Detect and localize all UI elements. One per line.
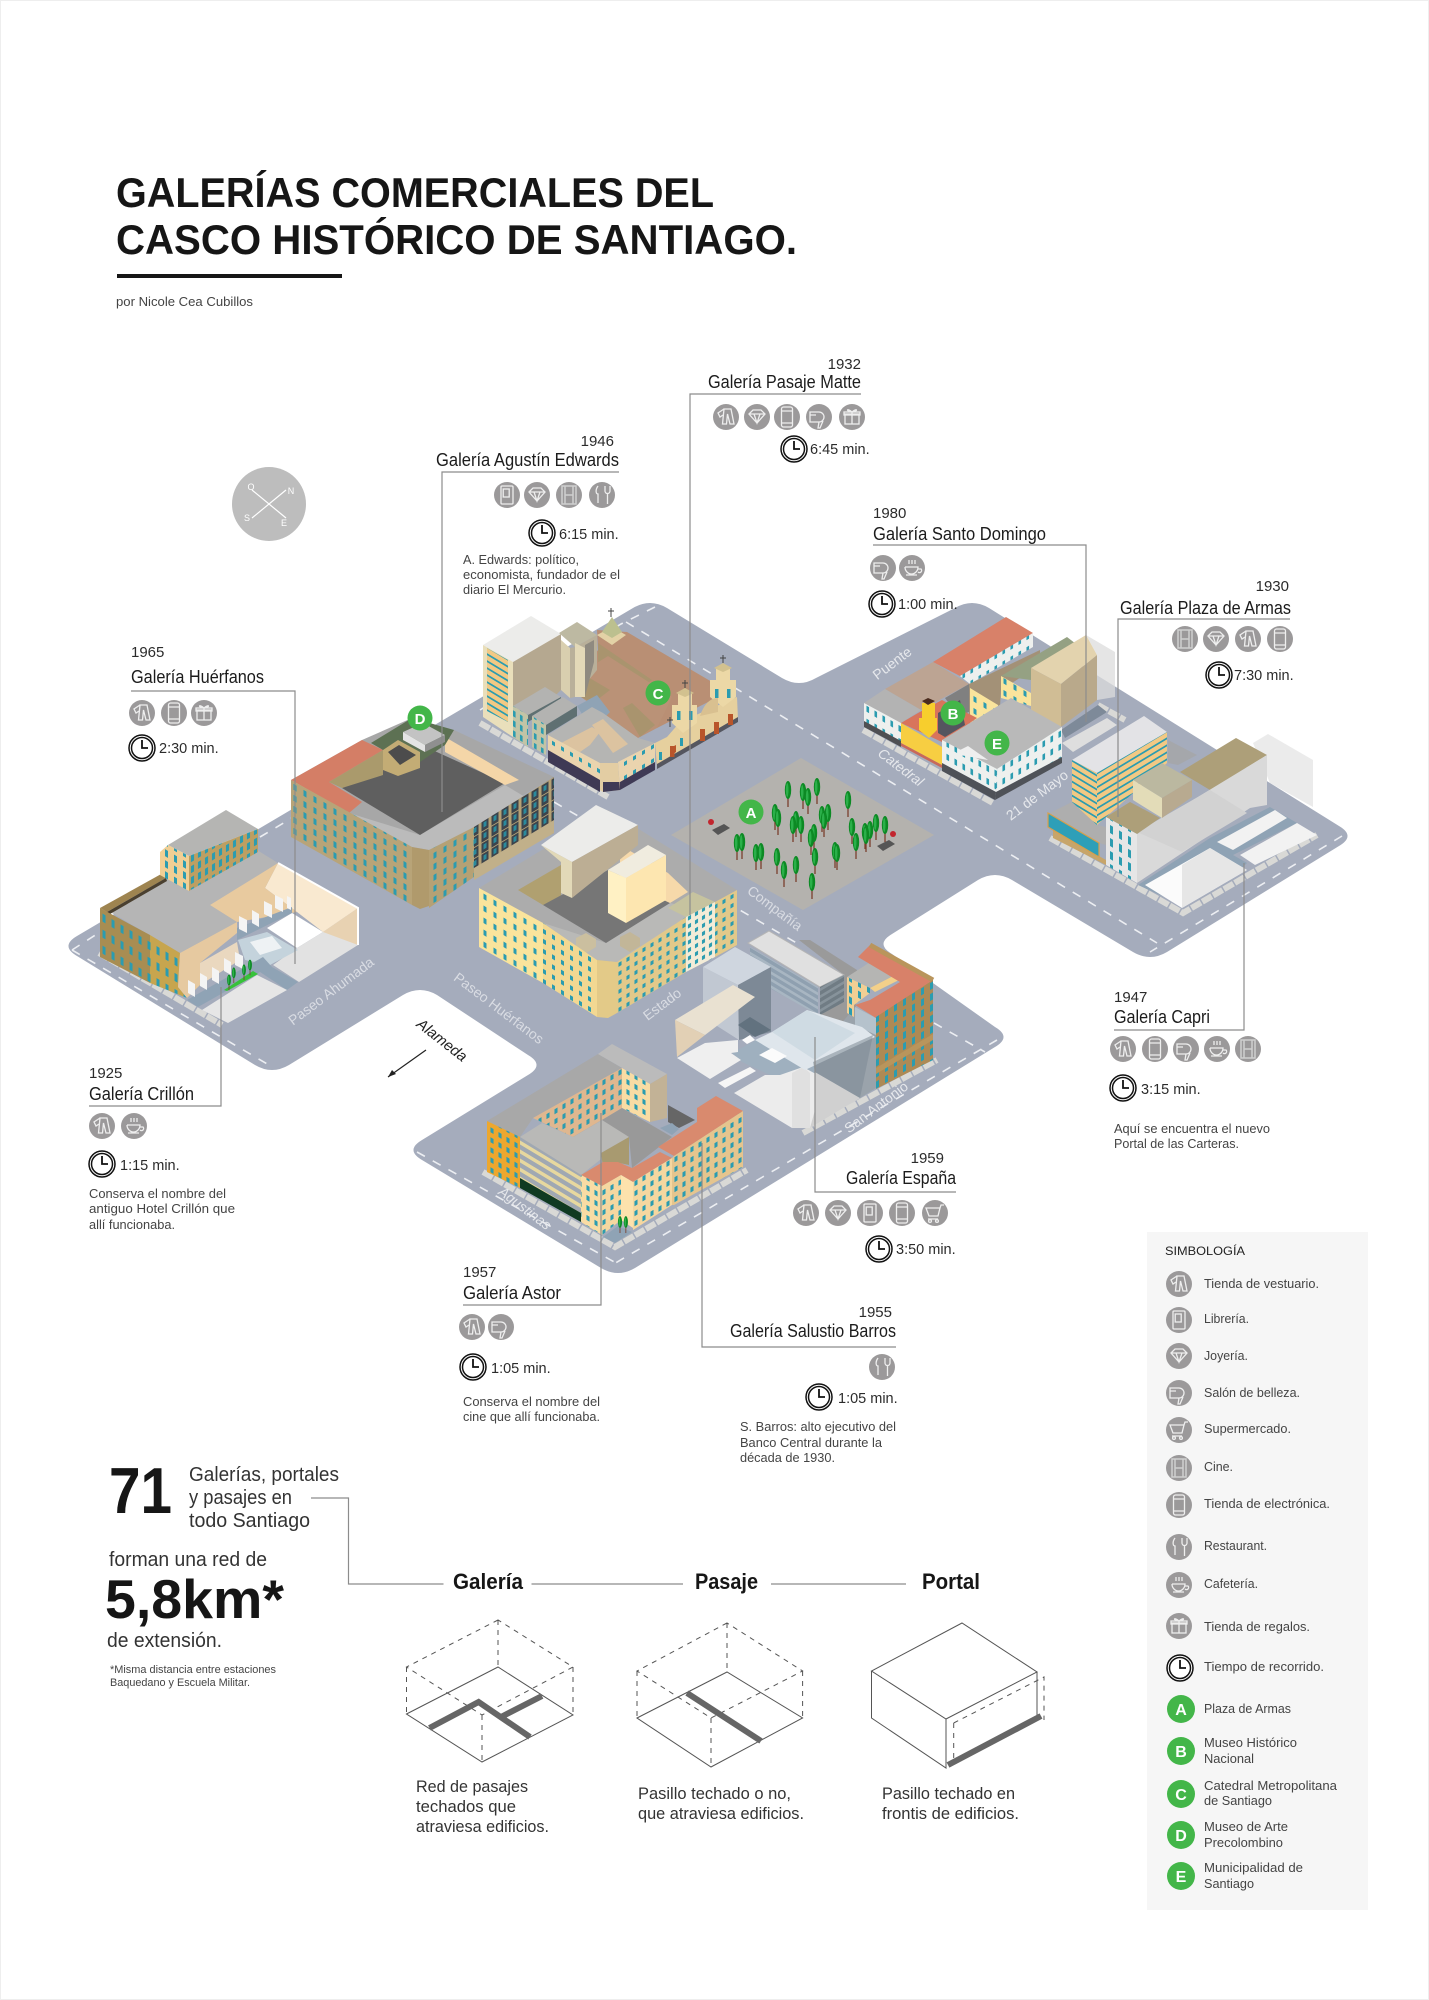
Alameda arrow — [388, 1015, 470, 1077]
callout: Galería Crillón — [89, 987, 235, 1232]
callout: Galería Agustín Edwards: diario El Mercurio. — [463, 582, 566, 597]
ghost box — [1253, 734, 1313, 807]
legend labels: Restaurant. — [1204, 1539, 1267, 1553]
callout: Galería Capri: Aquí se encuentra el nuevo — [1114, 1121, 1270, 1136]
caption: Pasaje — [638, 1784, 804, 1823]
red-roof wing — [933, 617, 1033, 676]
translucent volumes — [703, 947, 771, 985]
legend labels: Plaza de Armas — [1204, 1702, 1291, 1716]
courtyard — [668, 1105, 695, 1128]
legend labels: Tienda de vestuario. — [1204, 1277, 1319, 1291]
callout: Galería Pasaje Matte: 6:45 min. — [810, 442, 870, 458]
callout: Galería Crillón: 1:15 min. — [120, 1158, 180, 1174]
legend labels: Nacional — [1204, 1752, 1254, 1766]
statistic: 5,8km — [105, 1549, 285, 1689]
callout: Galería Agustín Edwards: 1946 — [581, 433, 614, 450]
block: Plaza de Armas gallery — [1048, 716, 1317, 908]
compass: S — [244, 513, 250, 523]
legend labels: Joyería. — [1204, 1349, 1248, 1363]
title: GALERÍAS COMERCIALES DEL — [116, 169, 714, 216]
block: Astor — [487, 1044, 743, 1243]
caption: Portal: Pasillo techado en — [882, 1784, 1015, 1803]
taupe long volume — [1180, 738, 1267, 790]
block: Crillón — [100, 810, 358, 1023]
statistic: 71 galerías: todo Santiago — [189, 1510, 310, 1532]
callout: Galería Crillón: allí funcionaba. — [89, 1217, 175, 1232]
landmark markers: C — [653, 686, 664, 703]
street map — [68, 603, 1348, 1273]
caption: Galería: atraviesa edificios. — [416, 1817, 549, 1836]
legend icons — [1166, 1271, 1193, 1681]
callout: Galería Crillón: antiguo Hotel Crillón que — [89, 1201, 235, 1216]
callout: Galería Crillón: 1925 — [89, 1065, 122, 1082]
street names: Paseo Ahumada — [285, 954, 377, 1028]
callout: Galería Santo Domingo: 1:00 min. — [898, 597, 958, 613]
callout: Galería Pasaje Matte: Galería Pasaje Matte — [708, 372, 861, 392]
legend labels: Salón de belleza. — [1204, 1386, 1300, 1400]
street names: Agustinas — [495, 1183, 554, 1233]
glass tower — [799, 940, 857, 1032]
diagram: Pasaje — [637, 1623, 803, 1767]
legend labels: Santiago — [1204, 1877, 1254, 1891]
street names: Compañía — [744, 882, 806, 934]
block: España — [675, 931, 933, 1128]
callout: Galería Capri: Galería Capri — [1114, 1007, 1210, 1027]
street names: 21 de Mayo — [1003, 766, 1071, 823]
landmark markers: B — [948, 706, 959, 723]
diagram: Galería — [406, 1620, 573, 1762]
legend landmark badges: D — [1175, 1828, 1187, 1845]
callout: Galería Agustín Edwards: Galería Agustín Edwards — [436, 450, 619, 470]
callout: Galería Capri: 1947 — [1114, 989, 1147, 1006]
hatched terrace — [1168, 740, 1197, 765]
callout: Galería Santo Domingo — [869, 505, 1086, 722]
callout: Galería Agustín Edwards: A. Edwards: político, — [463, 552, 579, 567]
ground strip — [1061, 705, 1107, 738]
title rule — [117, 274, 342, 278]
ground passages — [1138, 807, 1297, 905]
legend labels — [1204, 1277, 1337, 1891]
tall cream tower — [483, 616, 561, 662]
caption: Pasaje: que atraviesa edificios. — [638, 1804, 804, 1823]
callout: Galería Agustín Edwards: 6:15 min. — [559, 527, 619, 543]
callout: Galería Capri: Portal de las Carteras. — [1114, 1136, 1239, 1151]
callout: Galería Plaza de Armas: 1930 — [1256, 578, 1289, 595]
legend labels: Catedral Metropolitana — [1204, 1779, 1337, 1793]
museum roof annex — [371, 718, 454, 776]
beige block — [1133, 763, 1192, 798]
statistic: 71 galerías: y pasajes en — [189, 1487, 292, 1509]
legend labels: Precolombino — [1204, 1836, 1283, 1850]
rear wing — [533, 1068, 622, 1137]
plaza benches — [708, 819, 896, 851]
facades — [100, 908, 150, 983]
diagram: Portal — [872, 1623, 1044, 1768]
cream volume — [608, 845, 666, 923]
callout: Galería Capri — [1110, 863, 1270, 1151]
legend landmark badges — [1167, 1695, 1195, 1890]
cathedral front — [655, 697, 738, 769]
callout: Galería Salustio Barros: 1955 — [859, 1304, 892, 1321]
taupe and brown roofs — [969, 650, 1040, 725]
yellow tower — [919, 698, 937, 738]
municipal building — [942, 698, 1062, 800]
translucent main volume — [1137, 755, 1267, 883]
caption: Pasaje: Pasillo techado o no, — [638, 1784, 791, 1803]
striped tower — [1072, 716, 1167, 773]
connector and type headings: Portal — [922, 1569, 980, 1594]
callout: Galería Astor: cine que allí funcionaba. — [463, 1409, 600, 1424]
street names — [285, 643, 1071, 1233]
road dashes — [72, 607, 1342, 1265]
landmark markers: A — [746, 805, 757, 822]
corner facades — [581, 1175, 602, 1235]
caption: Portal — [882, 1784, 1019, 1823]
low green blocks — [513, 687, 610, 755]
callout: Galería Agustín Edwards — [436, 433, 620, 812]
ground plan — [732, 1038, 830, 1075]
statistic: 71 galerías: 71 — [109, 1454, 172, 1527]
callout: Galería Agustín Edwards: economista, fundador de el — [463, 567, 620, 582]
legend labels: Librería. — [1204, 1312, 1249, 1326]
title — [116, 169, 797, 263]
brown cathedral roof — [581, 630, 712, 728]
title: CASCO HISTÓRICO DE SANTIAGO. — [116, 215, 797, 263]
legend title: SIMBOLOGÍA — [1165, 1243, 1245, 1258]
callout: Galería España: 3:50 min. — [896, 1242, 956, 1258]
legend labels: Tienda de regalos. — [1204, 1620, 1310, 1634]
compass: N — [288, 486, 294, 496]
light blue plate — [755, 1010, 875, 1070]
legend landmark badges: B — [1175, 1744, 1187, 1761]
compass: E — [281, 518, 287, 528]
covered passage bands — [237, 907, 292, 940]
connector and type headings: Galería — [453, 1569, 524, 1594]
caption: Portal: frontis de edificios. — [882, 1804, 1019, 1823]
statistic: 5,8km: Baquedano y Escuela Militar. — [110, 1677, 250, 1689]
legend labels: Cine. — [1204, 1460, 1233, 1474]
callout: Galería Pasaje Matte — [690, 356, 870, 915]
callout: Galería Salustio Barros — [702, 1143, 898, 1465]
road network — [68, 603, 1348, 1273]
landmark markers: E — [992, 736, 1002, 753]
caption: Galería — [416, 1777, 549, 1836]
street names: Catedral — [875, 745, 928, 790]
callout: Galería España — [793, 1037, 957, 1262]
low teal building — [1050, 802, 1106, 845]
street names: San Antonio — [841, 1078, 911, 1136]
statistic: 5,8km: forman una red de — [109, 1549, 267, 1571]
sidewalks — [99, 705, 1317, 1247]
tan tall block — [1086, 635, 1115, 700]
author byline: por Nicole Cea Cubillos — [116, 295, 253, 309]
rear tan towers — [559, 622, 597, 698]
block: Museo Histórico and Municipalidad — [864, 617, 1117, 800]
caption: Galería: techados que — [416, 1797, 516, 1816]
callout: Galería Plaza de Armas — [1118, 578, 1294, 817]
callout: Galería Salustio Barros: Banco Central durante la — [740, 1435, 883, 1450]
callout: Galería Salustio Barros: 1:05 min. — [838, 1391, 898, 1407]
left grey wing — [864, 689, 921, 723]
callout: Galería Astor: Conserva el nombre del — [463, 1394, 600, 1409]
forecourt and street trees — [603, 1216, 632, 1243]
legend labels: Cafetería. — [1204, 1577, 1258, 1591]
compass — [232, 467, 306, 541]
cathedral facade block — [548, 707, 655, 792]
caption: Galería: Red de pasajes — [416, 1777, 528, 1796]
white rooftop volume — [541, 805, 638, 898]
landmark markers: D — [415, 711, 426, 728]
legend labels: Municipalidad de — [1204, 1861, 1303, 1875]
gallery trees — [227, 960, 252, 990]
light roof volume — [520, 1120, 629, 1175]
callout: Galería Astor: 1:05 min. — [491, 1361, 551, 1377]
ground and translucent volumes — [265, 863, 358, 982]
legend labels: de Santiago — [1204, 1794, 1272, 1808]
rooftop units — [576, 932, 640, 953]
yellow museum — [901, 723, 942, 765]
legend labels: Supermercado. — [1204, 1422, 1291, 1436]
legend labels: Tienda de electrónica. — [1204, 1497, 1330, 1511]
glazed fins — [188, 895, 291, 997]
callout: Galería Salustio Barros: Galería Salustio Barros — [730, 1321, 896, 1341]
callout: Galería Capri: 3:15 min. — [1141, 1082, 1201, 1098]
callout: Galería Santo Domingo: Galería Santo Domingo — [873, 524, 1046, 544]
callout: Galería Astor: Galería Astor — [463, 1283, 561, 1303]
connector and type headings: Pasaje — [695, 1569, 758, 1594]
compass: O — [247, 482, 255, 492]
callout: Galería Huérfanos: 2:30 min. — [159, 741, 219, 757]
green wing — [1001, 637, 1080, 680]
Plaza de Armas — [671, 758, 934, 910]
right brick building — [815, 1007, 876, 1098]
callout: Galería Salustio Barros: década de 1930. — [740, 1450, 835, 1465]
beige box — [675, 985, 755, 1035]
legend panel — [1147, 1232, 1368, 1910]
callout: Galería Pasaje Matte: 1932 — [828, 356, 861, 373]
connector and type headings — [311, 1498, 980, 1594]
callout: Galería Huérfanos: Galería Huérfanos — [131, 667, 264, 687]
statistic: 5,8km: de extensión. — [107, 1630, 222, 1652]
street names: Estado — [640, 984, 684, 1024]
block: Huérfanos building — [291, 718, 554, 909]
legend landmark badges: E — [1176, 1869, 1187, 1886]
street names: Paseo Huérfanos — [451, 969, 547, 1047]
callout: Galería Crillón: Galería Crillón — [89, 1084, 194, 1104]
white corner building — [1106, 802, 1160, 834]
legend labels: Museo Histórico — [1204, 1736, 1297, 1750]
callout: Galería Plaza de Armas: 7:30 min. — [1234, 668, 1294, 684]
orange and stripe facades — [487, 1121, 520, 1188]
legend labels: Tiempo de recorrido. — [1204, 1660, 1324, 1674]
statistic: 71 galerías: Galerías, portales — [189, 1464, 339, 1486]
callout: Galería Huérfanos — [129, 644, 295, 964]
plaza trees — [734, 778, 888, 899]
statistic: 71 galerías — [109, 1454, 339, 1532]
callout: Galería Astor — [459, 1113, 601, 1424]
callout: Galería Santo Domingo: 1980 — [873, 505, 906, 522]
callout: Galería Astor: 1957 — [463, 1264, 496, 1281]
callout: Galería Plaza de Armas: Galería Plaza de Armas — [1120, 598, 1291, 618]
upper volume — [168, 810, 258, 856]
statistic: 5,8km: *Misma distancia entre estaciones — [110, 1664, 276, 1676]
statistic: 5,8km: 5,8km* — [105, 1568, 285, 1630]
callout: Galería Crillón: Conserva el nombre del — [89, 1186, 226, 1201]
red plinth — [901, 700, 977, 742]
callout: Galería España: 1959 — [911, 1150, 944, 1167]
legend landmark badges: C — [1175, 1787, 1187, 1804]
callout: Galería Salustio Barros: S. Barros: alto ejecutivo del — [740, 1419, 896, 1434]
roof — [112, 850, 278, 953]
callout: Galería España: Galería España — [846, 1168, 957, 1188]
legend landmark badges: A — [1175, 1702, 1187, 1719]
rear bell tower dome — [597, 608, 626, 645]
salmon roofs — [581, 1152, 672, 1186]
block: Catedral — [483, 608, 738, 792]
cathedral towers — [667, 655, 736, 733]
street names: Puente — [869, 643, 915, 683]
Alameda arrow: Alameda — [412, 1015, 470, 1065]
legend labels: Museo de Arte — [1204, 1820, 1288, 1834]
block: Pasaje Matte — [479, 805, 737, 1018]
callout: Galería Huérfanos: 1965 — [131, 644, 164, 661]
landmark markers — [408, 680, 1010, 824]
